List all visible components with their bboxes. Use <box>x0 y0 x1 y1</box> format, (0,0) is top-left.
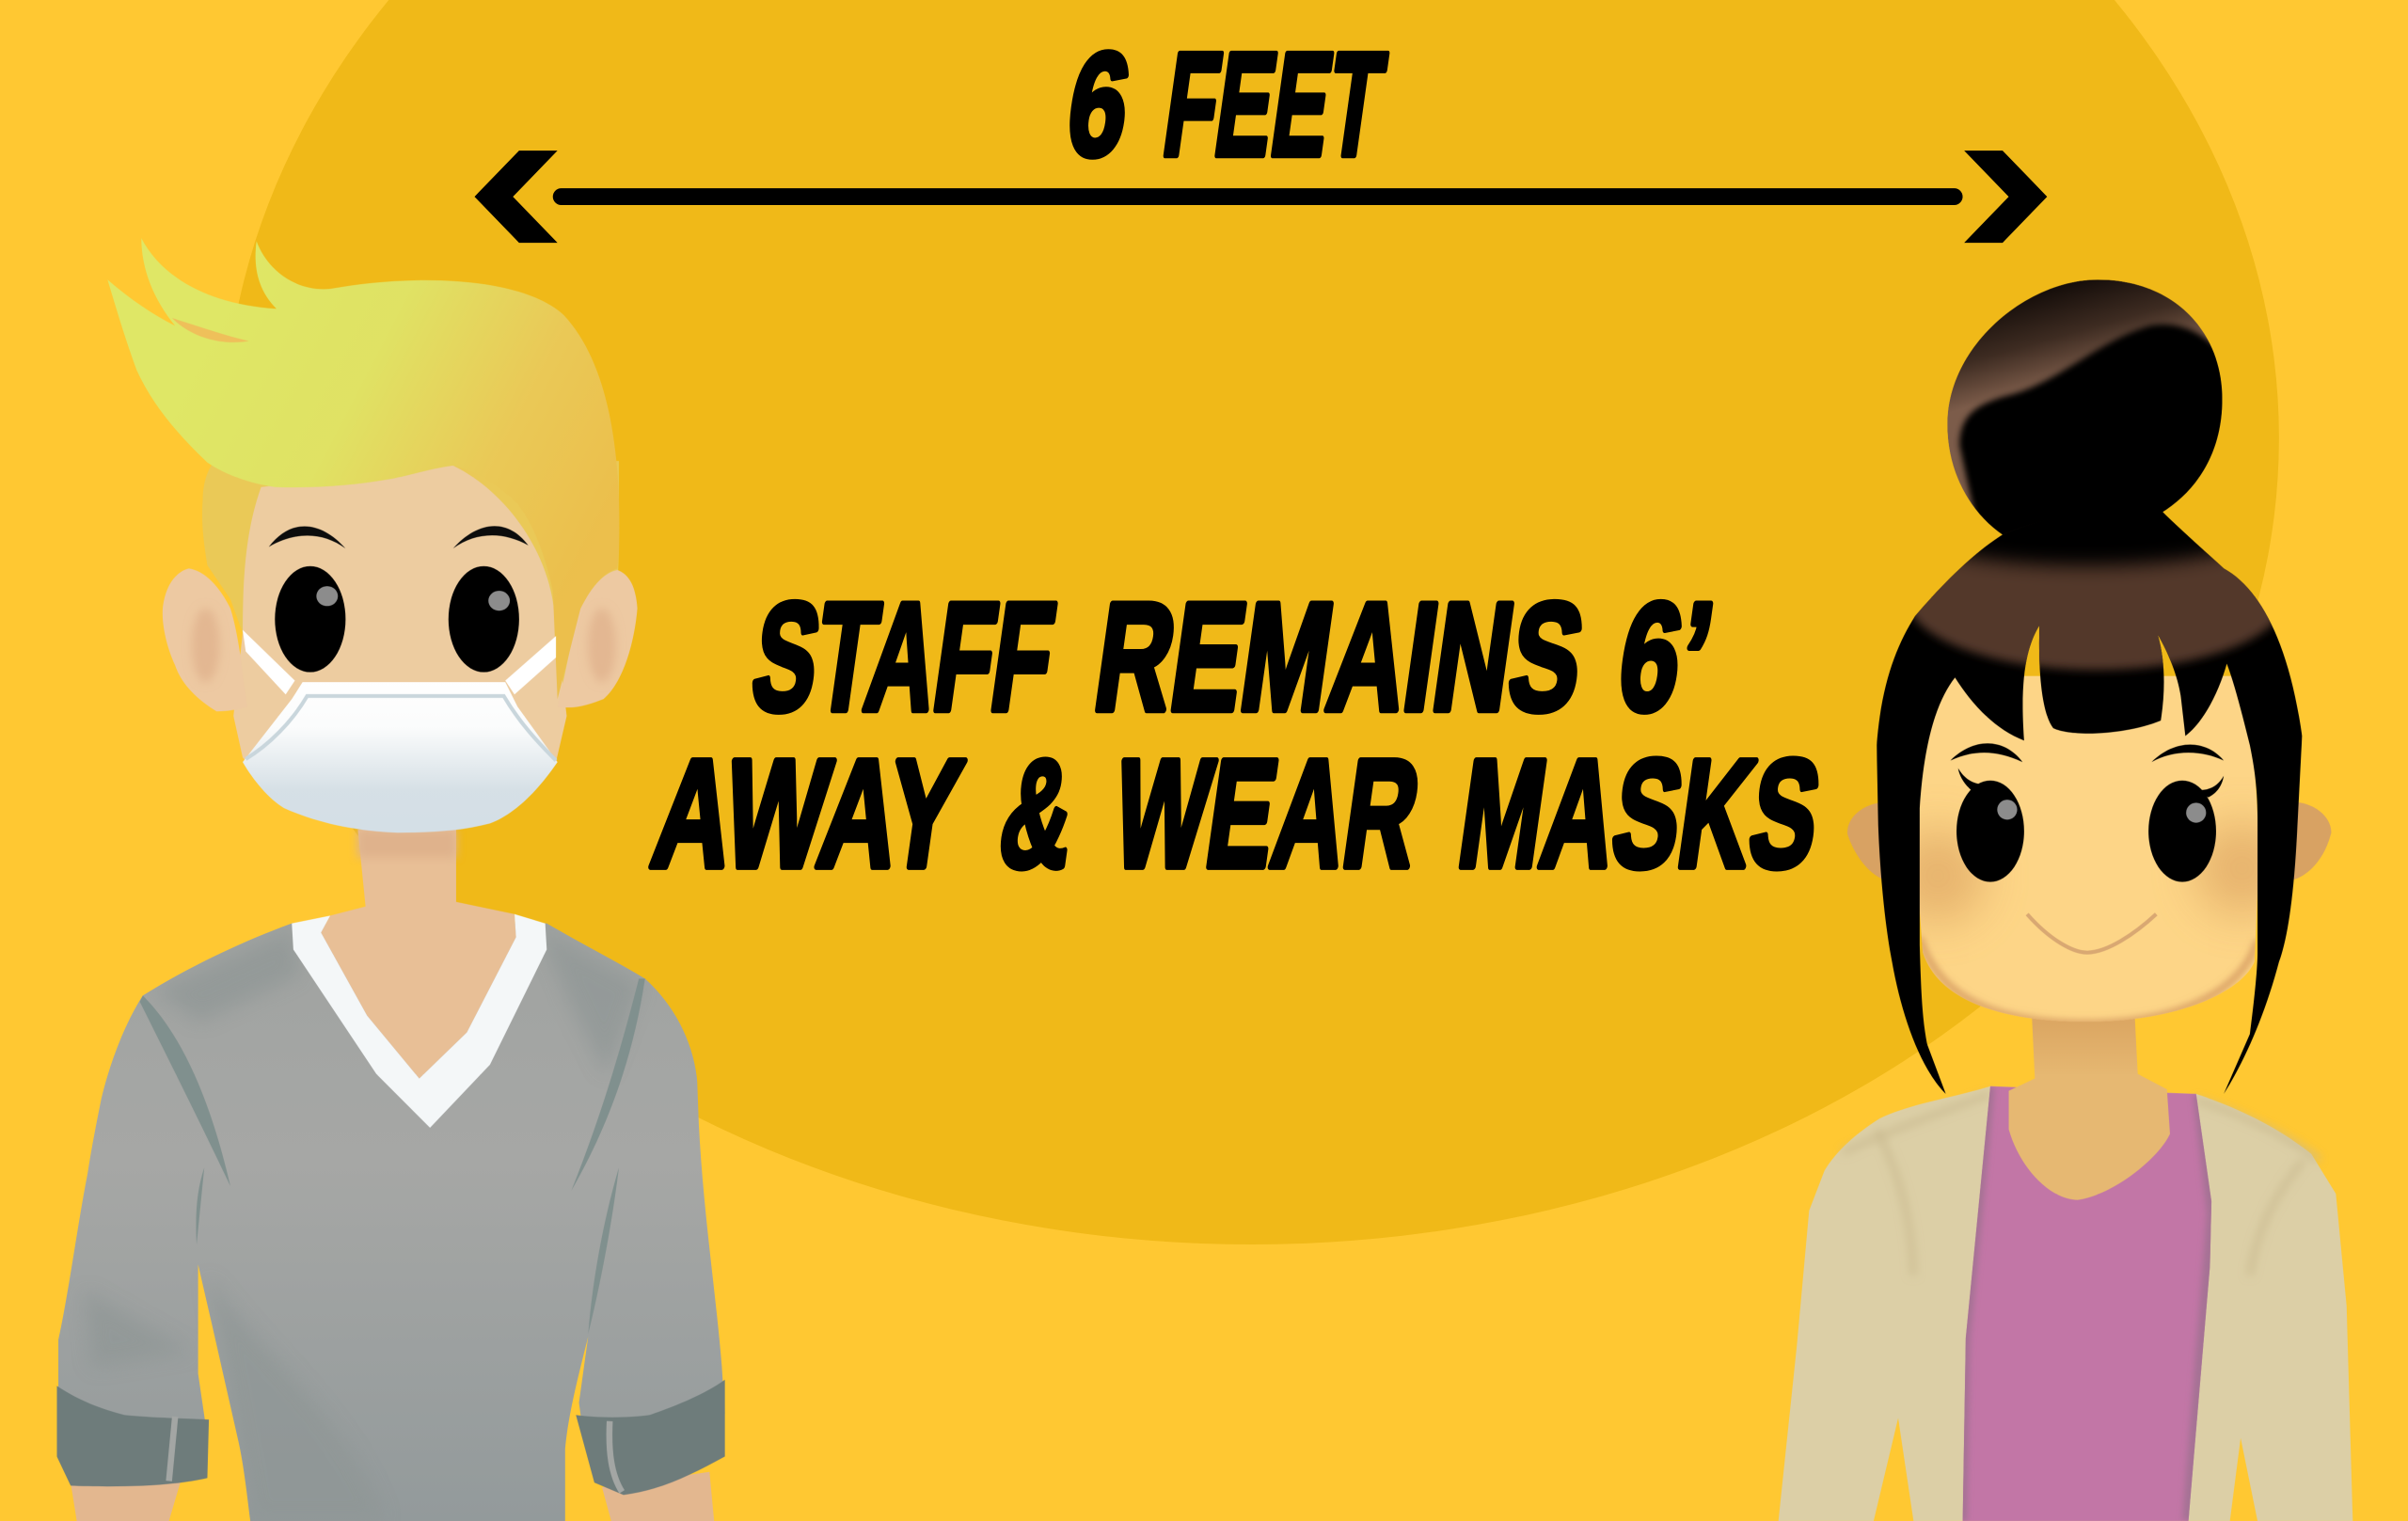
shirt edge shading <box>1959 1086 2214 1521</box>
inner ears <box>192 609 616 682</box>
line 1: REMAINS <box>1085 570 1593 742</box>
character: man wearing mask <box>56 238 725 1521</box>
line 1: STAFF <box>743 570 1064 742</box>
sleeve cuffs <box>56 1380 725 1495</box>
line 2: AWAY <box>643 727 972 899</box>
eyelashes <box>1958 768 2224 798</box>
mask fold lines <box>246 696 556 760</box>
hair <box>1876 512 2303 1094</box>
sweater <box>58 924 725 1521</box>
shirt <box>1963 1086 2211 1521</box>
neck shadow <box>357 830 456 857</box>
eyes <box>275 566 519 673</box>
heading: 6 feet: 6 <box>1058 23 1140 187</box>
face mask <box>243 682 558 832</box>
line 1 <box>743 570 1722 742</box>
line 2 <box>643 727 1830 899</box>
eyebrows <box>1950 743 2224 762</box>
face <box>233 466 566 789</box>
eyebrows <box>269 526 529 548</box>
neck <box>2009 1014 2170 1200</box>
hair tip shadow <box>172 318 248 342</box>
heading: 6 feet <box>1058 23 1393 187</box>
hair brown band <box>1911 538 2273 675</box>
smile <box>2027 914 2156 953</box>
character: woman <box>1779 279 2353 1521</box>
forearms <box>71 1472 714 1521</box>
line 2: WEAR <box>1104 727 1430 899</box>
back hair <box>202 461 619 706</box>
mask straps <box>243 630 556 694</box>
heading: 6 feet: FEET <box>1155 23 1393 187</box>
cardigan <box>1779 1086 2353 1521</box>
face <box>1918 676 2258 1022</box>
sweater soft shading <box>85 929 642 1521</box>
cardigan shading <box>1843 1094 2319 1275</box>
collar <box>292 914 547 1128</box>
ears <box>1847 802 2331 880</box>
background circle <box>224 0 2279 1244</box>
line 2: MASKS <box>1450 727 1830 899</box>
eyes <box>1956 781 2216 882</box>
message text <box>643 570 1830 899</box>
line 2: & <box>990 727 1085 899</box>
distance arrow <box>474 151 2047 243</box>
bun <box>1947 279 2222 534</box>
neck and chest <box>321 830 516 1079</box>
cheek shading <box>1920 811 2258 1022</box>
ears <box>163 568 638 711</box>
bun black interior <box>1959 325 2242 546</box>
sweater folds <box>140 978 645 1334</box>
front hair <box>107 238 619 699</box>
line 1: 6’ <box>1609 570 1722 742</box>
hair top shadow <box>1962 512 2219 577</box>
